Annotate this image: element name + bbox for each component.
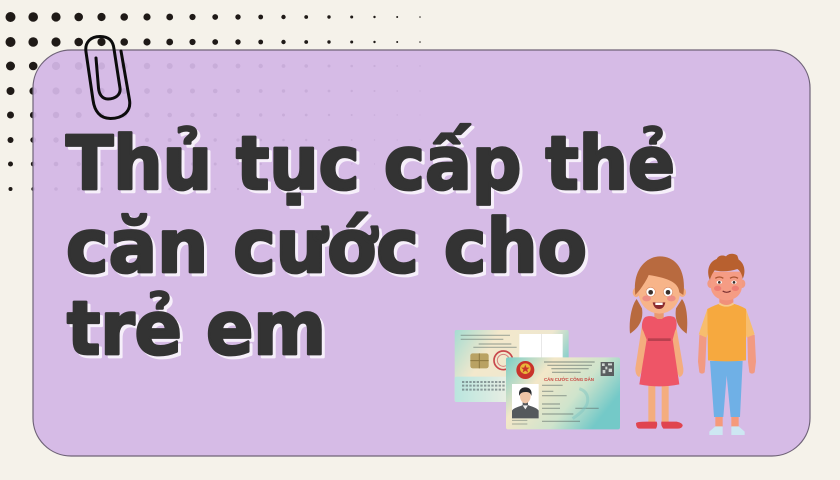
girl cheeks (642, 295, 651, 301)
boy cheeks (714, 286, 721, 291)
girl dress (639, 316, 679, 386)
title (66, 121, 675, 372)
boy arms (698, 335, 756, 374)
boy sleeves (699, 309, 755, 338)
panel: purple card (33, 50, 810, 456)
girl face (639, 271, 680, 314)
front of ID card (506, 357, 620, 429)
girl legs and shoes (636, 382, 683, 429)
icon: girl (630, 256, 687, 429)
boy hair (708, 254, 744, 280)
icon: paperclip (86, 36, 130, 118)
girl hair (635, 256, 684, 295)
icon: ID cards (455, 330, 620, 429)
front of ID card: CĂN CƯỚC CÔNG DÂN (544, 375, 595, 382)
boy shirt (707, 304, 746, 361)
boy face (711, 272, 742, 300)
title: Thủ tục cấp thẻ (66, 121, 675, 207)
boy mouth (723, 291, 731, 292)
girl teeth (655, 303, 663, 305)
girl eyes (646, 287, 673, 297)
girl waistband (648, 338, 671, 341)
boy ears (707, 279, 745, 288)
girl mouth (653, 302, 665, 309)
boy brows and eyes (715, 277, 738, 284)
title: trẻ em (67, 286, 326, 372)
back of ID card (455, 330, 569, 402)
girl neck (654, 308, 664, 319)
boy collar (719, 302, 734, 307)
boy neck (719, 295, 733, 305)
dot pattern (6, 12, 421, 191)
icon: boy (698, 254, 756, 435)
boy legs and shoes (709, 361, 745, 435)
girl pigtails (630, 299, 687, 334)
girl arms (635, 325, 683, 377)
girl ears (633, 288, 686, 297)
title: căn cước cho (66, 204, 587, 290)
